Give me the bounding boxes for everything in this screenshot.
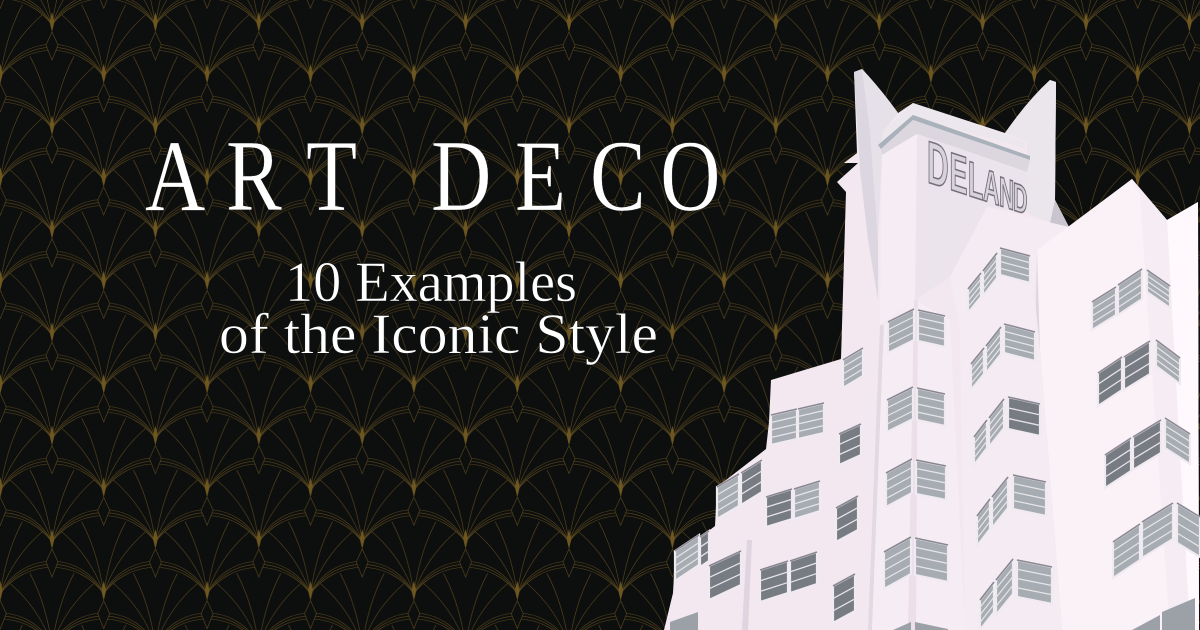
windows: second corner column bbox=[968, 248, 1052, 630]
sign lettering: N bbox=[999, 169, 1014, 220]
shading: fins and parapet bbox=[854, 69, 1069, 330]
sign lettering: E bbox=[950, 142, 968, 208]
subtitle: 10 Examples bbox=[285, 251, 577, 314]
windows: right block column bbox=[1092, 269, 1200, 630]
sign lettering: D bbox=[927, 129, 949, 203]
title: ART DECO bbox=[145, 120, 721, 233]
shading: central column edges bbox=[742, 300, 1062, 630]
windows: stepped lower wing bbox=[670, 403, 824, 630]
illustration: Delano hotel building bbox=[664, 69, 1200, 630]
sign lettering: L bbox=[968, 152, 983, 212]
windows: central corner column bbox=[884, 309, 948, 630]
sign lettering: A bbox=[983, 159, 1000, 216]
subtitle: of the Iconic Style bbox=[219, 303, 658, 366]
windows: narrow column bbox=[833, 348, 863, 623]
building silhouette bbox=[664, 69, 1199, 630]
subtitle bbox=[219, 251, 658, 366]
shading: bright right block bbox=[1035, 179, 1199, 630]
sign lettering: D bbox=[1013, 174, 1027, 223]
